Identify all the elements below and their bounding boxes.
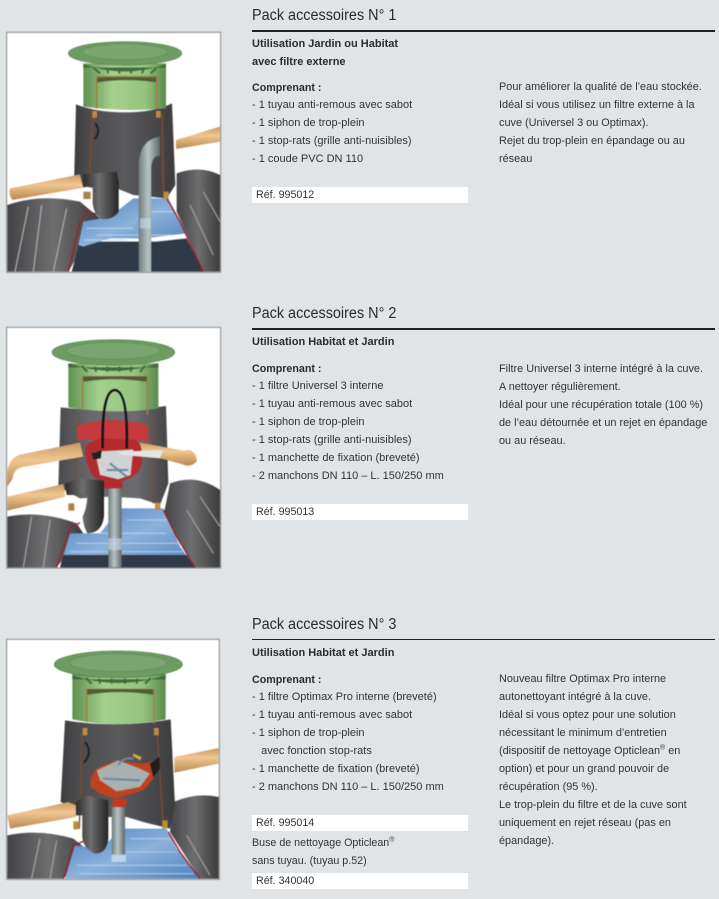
divider rule bbox=[252, 328, 715, 330]
description: ou au réseau. bbox=[499, 435, 566, 447]
contents list: - 1 filtre Optimax Pro interne (breveté) bbox=[252, 691, 437, 703]
description: Idéal si vous optez pour une solution bbox=[499, 709, 676, 721]
description: Idéal si vous utilisez un filtre externe à la bbox=[499, 99, 695, 111]
contents list: - 2 manchons DN 110 – L. 150/250 mm bbox=[252, 781, 444, 793]
contents list: - 2 manchons DN 110 – L. 150/250 mm bbox=[252, 470, 444, 482]
contents list: - 1 siphon de trop-plein bbox=[252, 117, 365, 129]
description: Rejet du trop-plein en épandage ou au bbox=[499, 135, 685, 147]
panel: pack accessoires 1 bbox=[6, 7, 715, 274]
divider rule bbox=[252, 639, 715, 640]
description: réseau bbox=[499, 153, 532, 165]
description: autonettoyant intégré à la cuve. bbox=[499, 691, 651, 703]
contents list: - 1 tuyau anti-remous avec sabot bbox=[252, 99, 412, 111]
heading: Pack accessoires N° 3 bbox=[252, 616, 396, 633]
contents list bbox=[252, 362, 444, 482]
description: Le trop-plein du filtre et de la cuve sont bbox=[499, 799, 687, 811]
contents list: Comprenant : bbox=[252, 82, 321, 94]
reference: Réf. 995014 bbox=[256, 817, 314, 829]
description: Filtre Universel 3 interne intégré à la cuve. bbox=[499, 363, 703, 375]
description: Pour améliorer la qualité de l’eau stockée. bbox=[499, 81, 702, 93]
usage subtitle bbox=[252, 38, 398, 68]
usage subtitle: Utilisation Habitat et Jardin bbox=[252, 646, 394, 658]
description bbox=[499, 673, 687, 847]
reference bbox=[252, 187, 468, 203]
description: cuve (Universel 3 ou Optimax). bbox=[499, 117, 648, 129]
heading: Pack accessoires N° 2 bbox=[252, 305, 396, 322]
description: A nettoyer régulièrement. bbox=[499, 381, 621, 393]
description: option) et pour un grand pouvoir de bbox=[499, 763, 669, 775]
contents list: Comprenant : bbox=[252, 362, 321, 374]
contents list: - 1 filtre Universel 3 interne bbox=[252, 380, 383, 392]
reference bbox=[252, 873, 468, 889]
description: uniquement en rejet réseau (pas en bbox=[499, 817, 671, 829]
usage subtitle: Utilisation Jardin ou Habitat bbox=[252, 38, 398, 50]
contents list: Comprenant : bbox=[252, 674, 321, 686]
note: nozzle bbox=[252, 836, 394, 866]
contents list: - 1 siphon de trop-plein bbox=[252, 416, 365, 428]
reference: Réf. 995013 bbox=[256, 506, 314, 518]
reference: Réf. 995012 bbox=[256, 189, 314, 201]
contents list bbox=[252, 674, 444, 793]
description: (dispositif de nettoyage Opticlean® en bbox=[499, 744, 680, 757]
divider rule bbox=[252, 30, 715, 32]
panel: pack accessoires 2 bbox=[6, 305, 715, 569]
contents list: - 1 coude PVC DN 110 bbox=[252, 153, 363, 165]
usage subtitle: avec filtre externe bbox=[252, 56, 346, 68]
description: Nouveau filtre Optimax Pro interne bbox=[499, 673, 666, 685]
reference bbox=[252, 815, 468, 831]
note: nozzle: sans tuyau. (tuyau p.52) bbox=[252, 854, 367, 866]
contents list: - 1 tuyau anti-remous avec sabot bbox=[252, 709, 412, 721]
contents list: avec fonction stop-rats bbox=[261, 745, 372, 757]
contents list: - 1 tuyau anti-remous avec sabot bbox=[252, 398, 412, 410]
contents list bbox=[252, 82, 412, 165]
description: Idéal pour une récupération totale (100 %) bbox=[499, 399, 703, 411]
description bbox=[499, 81, 702, 165]
panel: pack accessoires 3 bbox=[6, 616, 715, 889]
contents list: - 1 siphon de trop-plein bbox=[252, 727, 365, 739]
illustration: pack 1 tank cutaway bbox=[6, 31, 222, 274]
reference: Réf. 340040 bbox=[256, 875, 314, 887]
contents list: - 1 stop-rats (grille anti-nuisibles) bbox=[252, 135, 412, 147]
description bbox=[499, 363, 707, 447]
contents list: - 1 manchette de fixation (breveté) bbox=[252, 763, 420, 775]
contents list: - 1 stop-rats (grille anti-nuisibles) bbox=[252, 434, 412, 446]
note: nozzle: Buse de nettoyage Opticlean® bbox=[252, 836, 394, 849]
illustration: pack 3 tank cutaway bbox=[6, 638, 220, 880]
description: de l’eau détournée et un rejet en épandage bbox=[499, 417, 707, 429]
usage subtitle: Utilisation Habitat et Jardin bbox=[252, 336, 394, 348]
reference bbox=[252, 504, 468, 520]
contents list: - 1 manchette de fixation (breveté) bbox=[252, 452, 420, 464]
description: épandage). bbox=[499, 835, 554, 847]
description: nécessitant le minimum d’entretien bbox=[499, 727, 667, 739]
heading: Pack accessoires N° 1 bbox=[252, 7, 396, 24]
illustration: pack 2 tank cutaway bbox=[6, 326, 222, 569]
description: récupération (95 %). bbox=[499, 781, 598, 793]
